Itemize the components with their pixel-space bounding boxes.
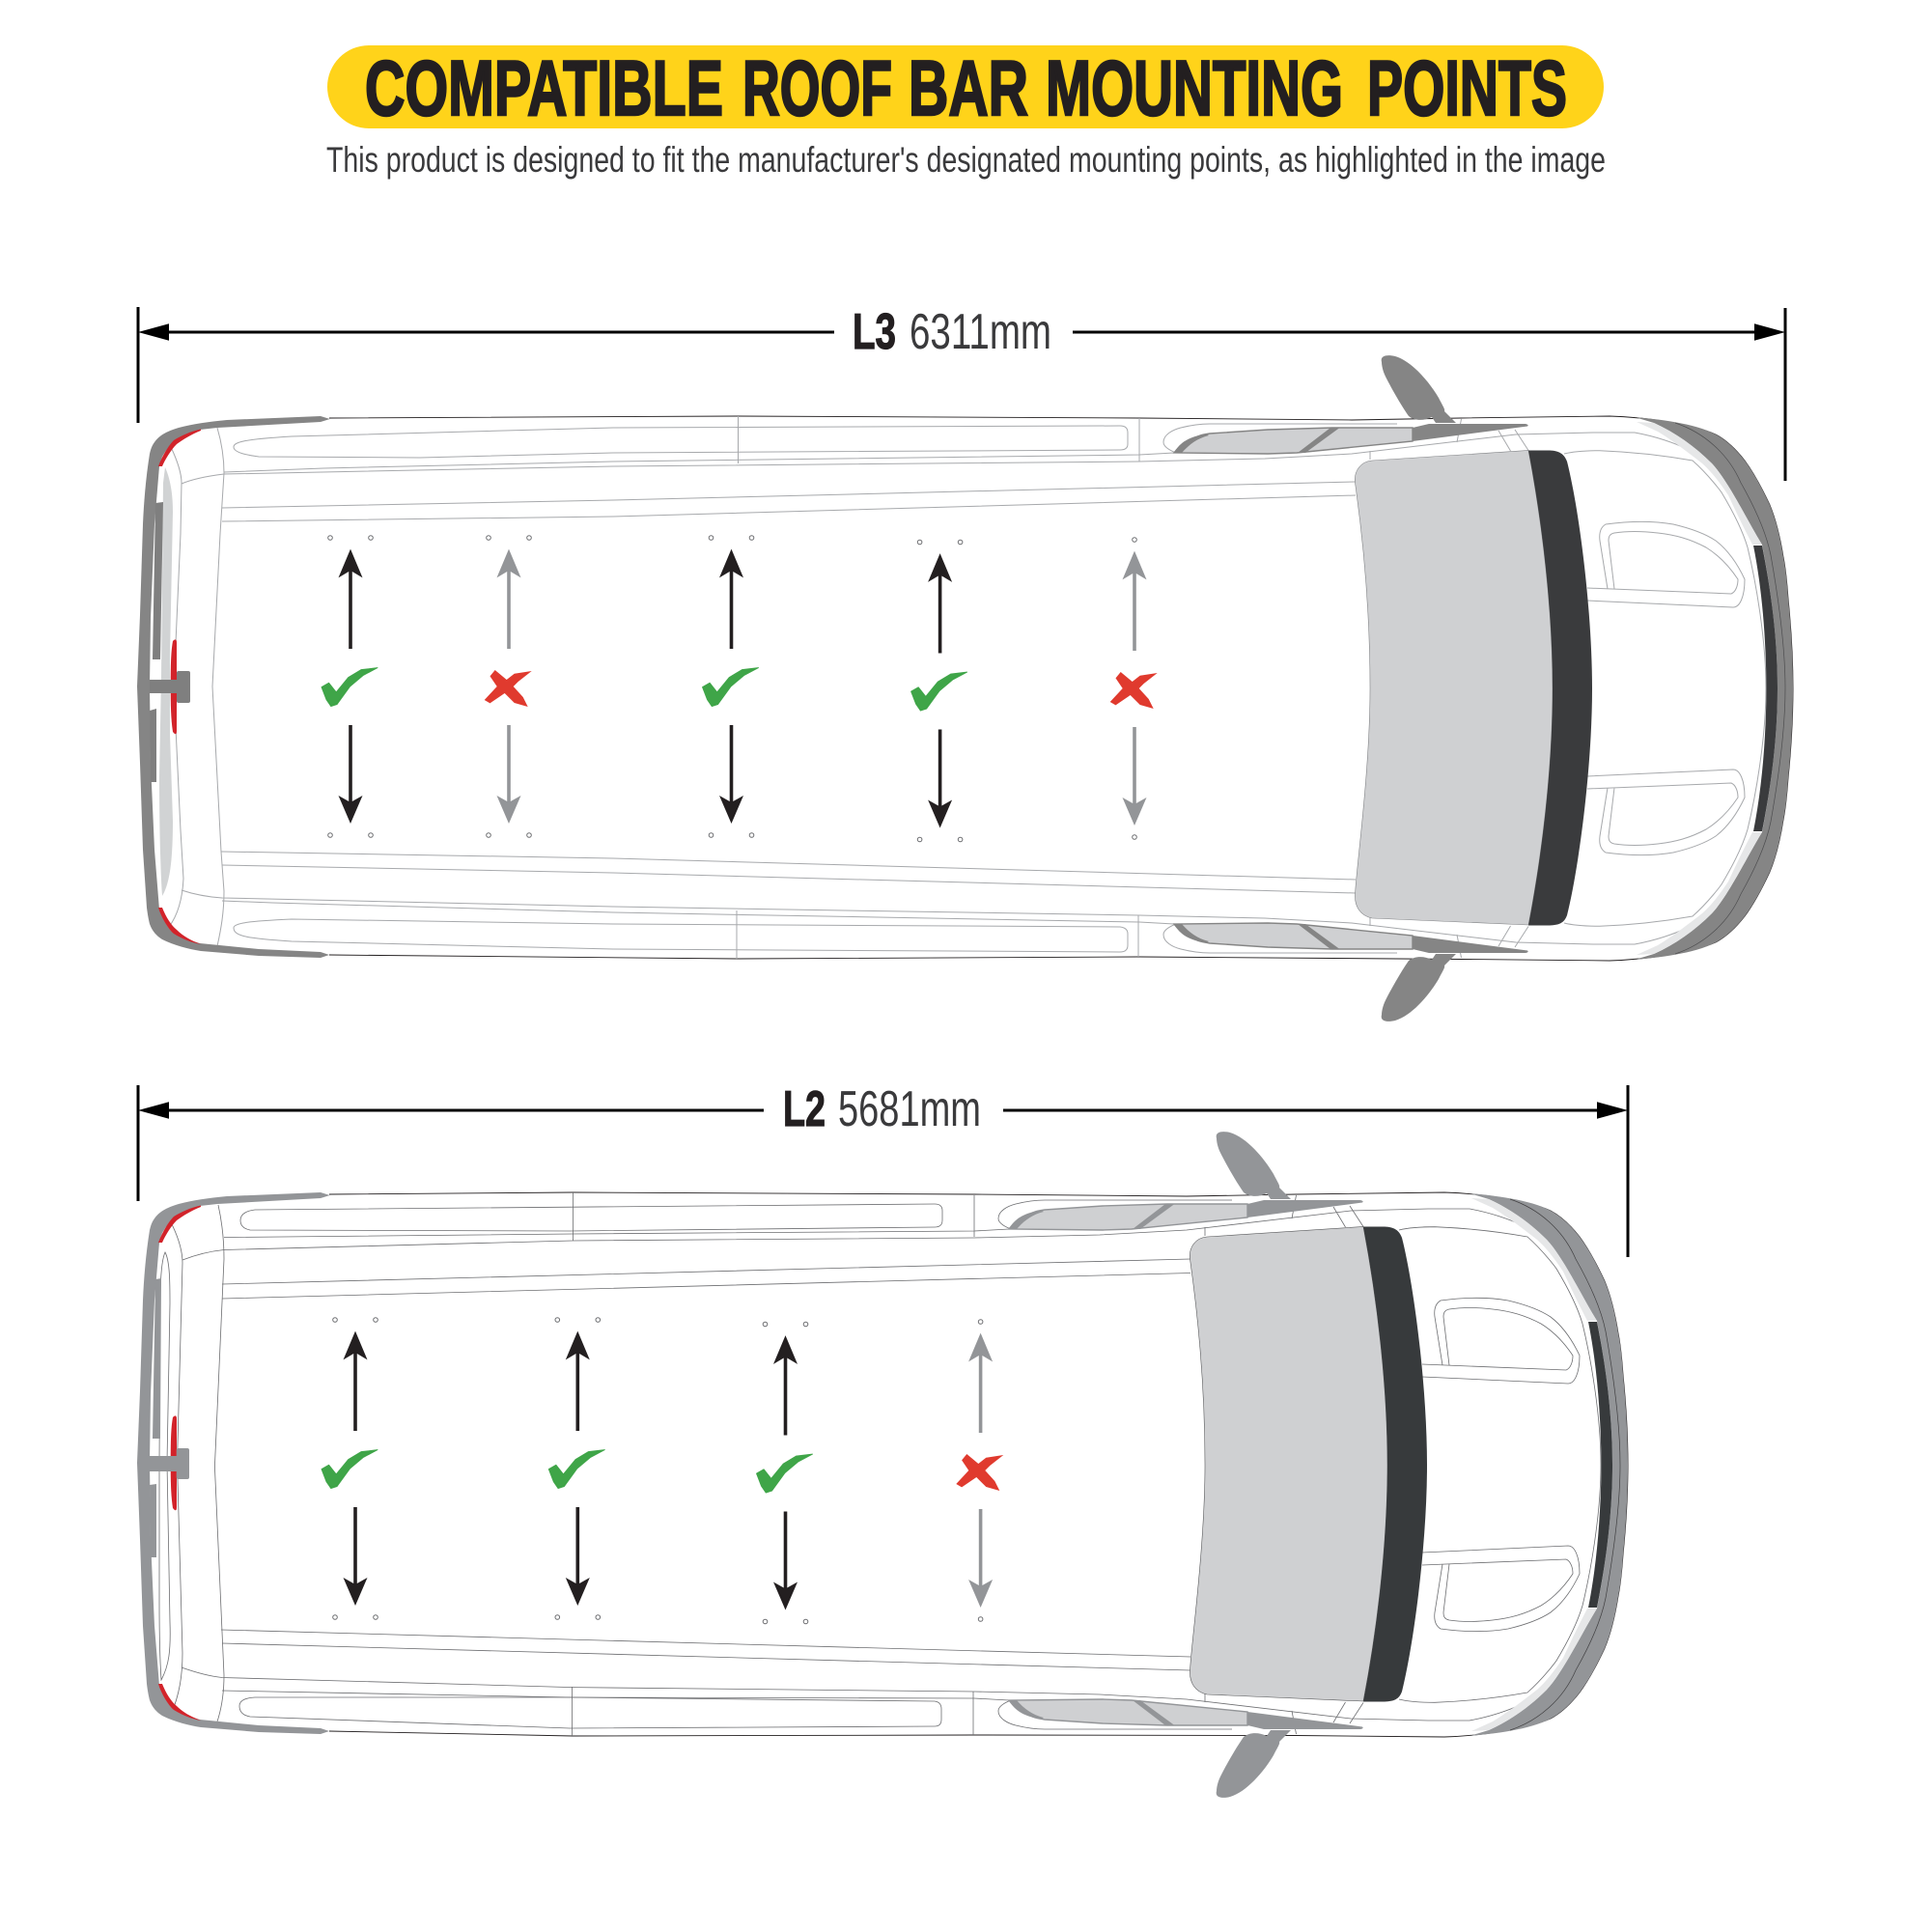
headlight strip [1471, 1198, 1597, 1321]
green tick [322, 1450, 378, 1489]
wing mirror [1217, 1132, 1291, 1199]
van L2 top view [137, 1132, 1628, 1798]
upper front half [1139, 355, 1793, 688]
title banner [327, 45, 1604, 132]
green tick [911, 672, 967, 711]
front section [974, 1132, 1628, 1798]
arrow down [338, 725, 363, 824]
green tick [322, 668, 378, 707]
rear door handle [149, 1448, 189, 1479]
title banner: POINTS [1367, 45, 1567, 132]
arrow down [968, 1509, 993, 1608]
van L3 top view [137, 355, 1793, 1021]
arrow up [344, 1331, 367, 1431]
tail lights [158, 1205, 201, 1721]
mounting holes [709, 536, 754, 837]
hood and side lines [1139, 419, 1766, 688]
grille strip [1588, 1322, 1612, 1465]
hood and side lines [974, 1195, 1601, 1465]
upper front half [974, 1132, 1628, 1465]
arrow down [928, 730, 952, 828]
green tick [548, 1450, 604, 1489]
roof lines [169, 416, 1356, 959]
title banner: BAR [909, 45, 1028, 132]
front bumper band [1635, 417, 1793, 688]
red cross [956, 1454, 1003, 1491]
lower front half [974, 1465, 1628, 1798]
bonnet dark band [1363, 1226, 1427, 1701]
arrow up [968, 1333, 993, 1433]
side window [1174, 428, 1413, 454]
front bumper band [1470, 1193, 1628, 1465]
grille strip [1753, 546, 1778, 688]
arrow up [1122, 551, 1147, 651]
dimension L2: 5681mm [838, 1081, 981, 1137]
L3 position 3: compatible [703, 536, 759, 837]
L2 position 3: compatible [757, 1322, 813, 1624]
mounting holes [487, 536, 531, 837]
rear door strips [150, 502, 163, 782]
windscreen [1190, 1226, 1387, 1701]
arrow up [338, 549, 363, 649]
title banner: COMPATIBLE [365, 45, 723, 132]
rear bumper band [137, 1192, 330, 1734]
arrow down [344, 1507, 367, 1606]
green tick [703, 668, 759, 707]
windscreen [1355, 450, 1553, 925]
rear door handle [150, 671, 190, 703]
front section [1139, 355, 1793, 1021]
mounting holes [555, 1318, 601, 1619]
bonnet dark band [1528, 450, 1592, 925]
arrow down [773, 1512, 798, 1610]
green tick [757, 1454, 813, 1493]
L2 position 1: compatible [322, 1318, 378, 1619]
side window [1009, 1204, 1247, 1230]
rear door strips [150, 1278, 161, 1557]
arrow up [928, 553, 952, 653]
L3 position 4: compatible [911, 540, 967, 842]
mounting holes [328, 536, 373, 837]
dimension L3: 6311mm [910, 304, 1051, 360]
dimension L2: L2 [783, 1081, 826, 1137]
mounting holes [917, 540, 963, 842]
arrow up [496, 549, 521, 649]
bumper crease [1675, 423, 1785, 688]
rear window [159, 467, 173, 896]
roof lines [159, 1192, 1190, 1736]
arrow down [566, 1507, 590, 1606]
mounting holes [763, 1322, 808, 1624]
arrow up [566, 1331, 590, 1431]
dimension L3: L3 [853, 304, 896, 360]
rear bumper band [137, 416, 330, 958]
arrow up [719, 549, 743, 649]
window frame and divider [1009, 1200, 1363, 1229]
dimension L2 [137, 1081, 1630, 1257]
red cross [485, 670, 532, 707]
L3 position 1: compatible [322, 536, 378, 837]
title banner: MOUNTING [1046, 45, 1343, 132]
mounting holes [333, 1318, 378, 1619]
wing mirror [1382, 355, 1456, 423]
L3 position 5: not compatible [1110, 538, 1158, 839]
arrow up [773, 1335, 798, 1435]
mounting holes [978, 1320, 983, 1621]
tail lights [158, 429, 201, 944]
body outline [329, 1192, 1628, 1737]
bumper crease [1510, 1199, 1620, 1465]
red cross [1110, 672, 1158, 709]
mounting holes [1133, 538, 1136, 839]
arrow down [719, 725, 743, 824]
arrow down [496, 725, 521, 824]
L3 position 2: not compatible [485, 536, 532, 837]
body outline [329, 416, 1793, 961]
L2 position 4: not compatible [956, 1320, 1003, 1621]
arrow down [1122, 727, 1147, 826]
headlight strip [1637, 422, 1762, 545]
L2 position 2: compatible [548, 1318, 604, 1619]
dimension L3 [137, 304, 1786, 481]
title banner: ROOF [742, 45, 892, 132]
lower front half [1139, 688, 1793, 1021]
window frame and divider [1174, 424, 1528, 453]
